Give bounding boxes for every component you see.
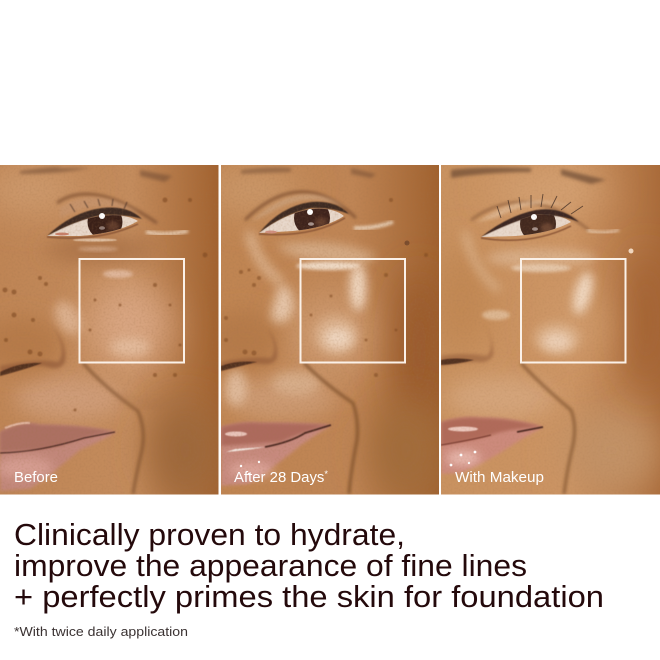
skin texture — [0, 176, 186, 488]
headline: Clinically proven to hydrate, — [14, 518, 405, 552]
panel: with makeup photo — [431, 165, 660, 495]
label: after 28 days: After 28 Days — [234, 470, 322, 486]
eye — [245, 192, 410, 246]
footnote: *With twice daily application — [14, 625, 188, 639]
nose — [0, 335, 66, 376]
freckles — [224, 198, 428, 377]
glow highlights — [465, 232, 634, 354]
nasolabial fold — [304, 363, 358, 494]
nose — [441, 342, 494, 366]
highlight square: after 28 days — [300, 259, 405, 362]
freckles — [2, 198, 208, 412]
nasolabial fold — [83, 363, 143, 494]
eye — [47, 194, 188, 252]
lips — [221, 422, 331, 486]
skin texture — [223, 176, 390, 481]
highlight square: with makeup — [521, 259, 626, 362]
lips — [441, 418, 543, 474]
eye — [471, 194, 619, 242]
lips — [0, 423, 116, 491]
headline: + perfectly primes the skin for foundation — [14, 580, 604, 614]
nasolabial fold — [521, 363, 575, 494]
panel: before photo — [0, 165, 221, 500]
headline: improve the appearance of fine lines — [14, 549, 527, 583]
hydrated glow highlights — [225, 232, 376, 406]
label: after 28 days: * — [324, 469, 328, 479]
highlight square: before — [80, 259, 184, 362]
headline — [14, 518, 604, 614]
label: before: Before — [14, 470, 58, 486]
label: with makeup: With Makeup — [455, 470, 544, 486]
skin texture — [449, 210, 634, 466]
nose — [221, 336, 278, 372]
panel: after 28 days photo — [221, 165, 439, 494]
